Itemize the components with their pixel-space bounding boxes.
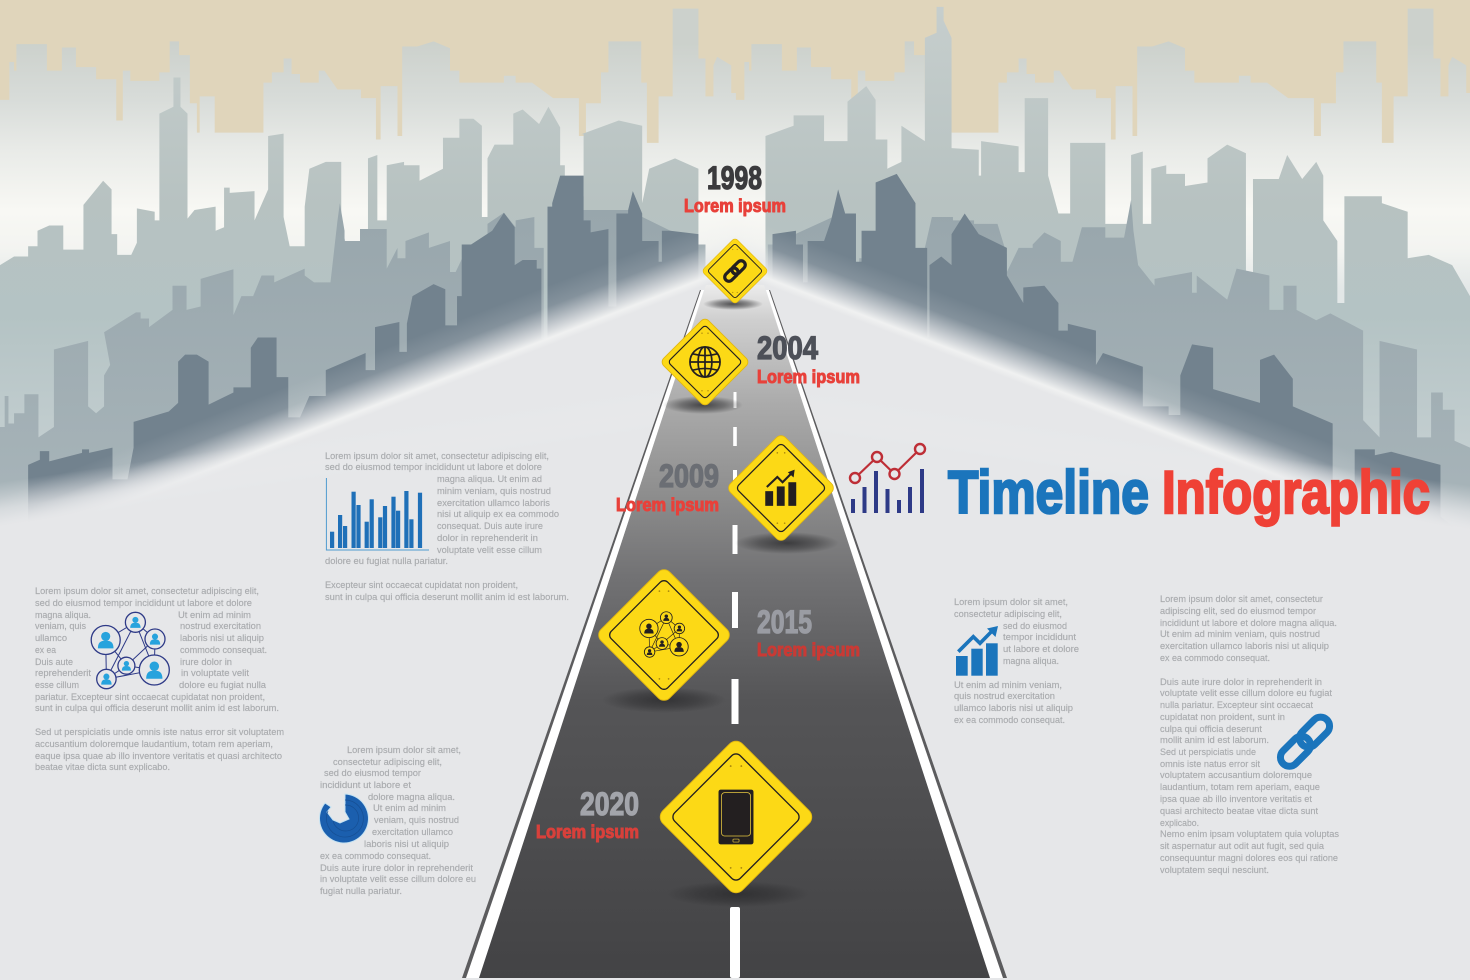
icon: chain: [723, 259, 747, 283]
icon: rising chart: [765, 470, 796, 506]
text block: lower middle: exercitation ullamco: [372, 826, 453, 837]
text block: lower middle: sed do eiusmod tempor: [324, 767, 421, 778]
text block: left: Lorem ipsum dolor sit amet, consectetur adipiscing elit,: [35, 585, 259, 596]
text block: right middle: tempor incididunt: [1003, 631, 1076, 642]
timeline label 2004: 2004: [757, 330, 818, 366]
text block: upper middle: nisi ut aliquip ex ea commodo: [437, 508, 559, 519]
text block: lower middle: Lorem ipsum dolor sit amet,: [347, 744, 461, 755]
text block: far right: adipiscing elit, sed do eiusmod tempor: [1160, 605, 1316, 616]
text block: upper middle: sed do eiusmod tempor incididunt ut labore et dolore: [325, 461, 542, 472]
text block: upper middle: sunt in culpa qui officia deserunt mollit anim id est laborum.: [325, 591, 569, 602]
centre dashes: [730, 392, 740, 978]
asphalt: [478, 285, 992, 978]
text block: left: commodo consequat.: [180, 644, 267, 655]
text block: left: dolore eu fugiat nulla: [179, 679, 267, 690]
text block: left: sunt in culpa qui officia deserunt mollit anim id est laborum.: [35, 702, 279, 713]
text block: right middle: consectetur adipiscing elit,: [954, 608, 1062, 619]
bar chart: [326, 478, 429, 550]
sign 1998: chain: [702, 238, 768, 304]
text block: far right: Sed ut perspiciatis unde: [1160, 746, 1256, 757]
text block: lower middle: in voluptate velit esse cillum dolore eu: [320, 873, 476, 884]
text block: right middle: ut labore et dolore: [1003, 643, 1079, 654]
ground left: [0, 0, 735, 980]
text block: far right: mollit anim id est laborum.: [1160, 734, 1269, 745]
sign 2009: chart: [726, 433, 836, 543]
text block: far right: cupidatat non proident, sunt in: [1160, 711, 1285, 722]
far skyline right: [735, 9, 1470, 980]
text block: lower middle: Duis aute irure dolor in reprehenderit: [320, 862, 473, 873]
text block: left: accusantium doloremque laudantium, totam rem aperiam,: [35, 738, 273, 749]
text block: right middle: [954, 596, 1079, 725]
near skyline right: [768, 200, 1470, 540]
text block: far right: ipsa quae ab illo inventore veritatis et: [1160, 793, 1312, 804]
text block: right middle: sed do eiusmod: [1003, 620, 1067, 631]
timeline label 1998: [684, 160, 786, 216]
ground right: [735, 0, 1470, 980]
text block: far right: Nemo enim ipsam voluptatem quia voluptas: [1160, 828, 1339, 839]
text block: right middle: magna aliqua.: [1003, 655, 1059, 666]
timeline label 2015: Lorem ipsum: [757, 639, 860, 660]
timeline label 2015: 2015: [757, 604, 812, 640]
text block: far right: Ut enim ad minim veniam, quis nostrud: [1160, 628, 1320, 639]
right outer line: [769, 290, 1007, 978]
sign shadows: [602, 298, 839, 907]
title: [948, 459, 1430, 526]
text block: left: magna aliqua.: [35, 609, 91, 620]
text block: left: [35, 585, 284, 772]
title icon: chart: [850, 444, 925, 513]
text block: far right: voluptatem accusantium doloremque: [1160, 769, 1312, 780]
text block: far right: voluptate velit esse cillum dolore eu fugiat: [1160, 687, 1332, 698]
icon: growth bars: [956, 626, 998, 676]
text block: left: in voluptate velit: [181, 667, 249, 678]
text block: left: reprehenderit: [35, 667, 91, 678]
icon: people network: [91, 612, 169, 689]
text block: right middle: ex ea commodo consequat.: [954, 714, 1065, 725]
text block: left: esse cillum: [35, 679, 79, 690]
text block: left: pariatur. Excepteur sint occaecat cupidatat non proident,: [35, 691, 265, 702]
sign 2004: globe: [660, 317, 750, 407]
text block: lower middle: Ut enim ad minim: [373, 802, 446, 813]
text block: far right: quasi architecto beatae vitae dicta sunt: [1160, 805, 1318, 816]
text block: lower middle: consectetur adipiscing elit,: [333, 756, 442, 767]
mid skyline right: [765, 7, 1470, 540]
text block: left: eaque ipsa quae ab illo inventore veritatis et quasi architecto: [35, 750, 282, 761]
icon: tablet: [719, 790, 753, 844]
text block: lower middle: veniam, quis nostrud: [374, 814, 459, 825]
sign 2015: network: [595, 566, 733, 704]
sign 2020: tablet: [656, 737, 816, 897]
near skyline left: [0, 203, 705, 540]
text block: right middle: ullamco laboris nisi ut aliquip: [954, 702, 1073, 713]
timeline label 2020: Lorem ipsum: [536, 821, 639, 842]
text block: left: laboris nisi ut aliquip: [180, 632, 264, 643]
text block: lower middle: dolore magna aliqua.: [368, 791, 455, 802]
text block: lower middle: ex ea commodo consequat.: [320, 850, 431, 861]
text block: far right: culpa qui officia deserunt: [1160, 723, 1262, 734]
text block: left: ullamco: [35, 632, 67, 643]
text block: far right: exercitation ullamco laboris nisi ut aliquip: [1160, 640, 1329, 651]
text block: left: Sed ut perspiciatis unde omnis iste natus error sit voluptatem: [35, 726, 284, 737]
text block: upper middle: Excepteur sint occaecat cupidatat non proident,: [325, 579, 518, 590]
text block: far right: ex ea commodo consequat.: [1160, 652, 1270, 663]
text block: right middle: Lorem ipsum dolor sit amet,: [954, 596, 1068, 607]
timeline label 2020: [536, 786, 639, 842]
text block: far right: [1160, 593, 1339, 875]
road: [462, 285, 1007, 978]
timeline label 1998: 1998: [707, 160, 762, 196]
text block: far right: laudantium, totam rem aperiam, eaque: [1160, 781, 1320, 792]
dark skyline left: [28, 176, 698, 540]
icon: people network: [640, 612, 688, 657]
text block: upper middle: exercitation ullamco laboris: [437, 497, 550, 508]
text block: upper middle: consequat. Duis aute irure: [437, 520, 543, 531]
text block: lower middle: fugiat nulla pariatur.: [320, 885, 402, 896]
text block: upper middle: magna aliqua. Ut enim ad: [437, 473, 542, 484]
text block: far right: nulla pariatur. Excepteur sint occaecat: [1160, 699, 1313, 710]
text block: upper middle: Lorem ipsum dolor sit amet, consectetur adipiscing elit,: [325, 450, 549, 461]
text block: left: ex ea: [35, 644, 57, 655]
text block: left: sed do eiusmod tempor incididunt ut labore et dolore: [35, 597, 252, 608]
timeline label 2009: 2009: [659, 458, 719, 494]
far skyline left: [0, 9, 736, 980]
timeline label 2009: Lorem ipsum: [616, 494, 719, 515]
text block: lower middle: [320, 744, 476, 896]
text block: far right: Lorem ipsum dolor sit amet, consectetur: [1160, 593, 1323, 604]
mid skyline left: [0, 77, 705, 540]
text block: left: beatae vitae dicta sunt explicabo.: [35, 761, 170, 772]
text block: left: Duis aute: [35, 656, 73, 667]
timeline label 2004: [757, 330, 860, 387]
timeline label 2009: [616, 458, 719, 515]
text block: upper middle: voluptate velit esse cillum: [437, 544, 542, 555]
text block: lower middle: incididunt ut labore et: [320, 779, 411, 790]
text block: right middle: Ut enim ad minim veniam,: [954, 679, 1062, 690]
text block: left: nostrud exercitation: [180, 620, 261, 631]
left outer line: [462, 290, 701, 978]
text block: left: Ut enim ad minim: [178, 609, 251, 620]
text block: upper middle: dolor in reprehenderit in: [437, 532, 538, 543]
right edge line: [766, 290, 1005, 978]
text block: far right: sit aspernatur aut odit aut fugit, sed quia: [1160, 840, 1325, 851]
timeline label 2004: Lorem ipsum: [757, 366, 860, 387]
text block: far right: explicabo.: [1160, 817, 1199, 828]
text block: upper middle: [325, 450, 569, 602]
timeline label 2020: 2020: [580, 786, 639, 822]
left edge line: [463, 290, 704, 978]
text block: left: irure dolor in: [180, 656, 232, 667]
text block: right middle: quis nostrud exercitation: [954, 690, 1055, 701]
timeline label 1998: Lorem ipsum: [684, 195, 786, 216]
timeline label 2015: [757, 604, 860, 660]
title: Timeline: [948, 459, 1149, 526]
icon: globe: [690, 347, 720, 377]
text block: far right: omnis iste natus error sit: [1160, 758, 1260, 769]
text block: lower middle: laboris nisi ut aliquip: [364, 838, 449, 849]
text block: far right: Duis aute irure dolor in reprehenderit in: [1160, 676, 1322, 687]
text block: upper middle: dolore eu fugiat nulla pariatur.: [325, 555, 448, 566]
text block: left: veniam, quis: [35, 620, 86, 631]
icon: blue chain link: [1277, 713, 1333, 770]
text block: upper middle: minim veniam, quis nostrud: [437, 485, 551, 496]
text block: far right: voluptatem sequi nesciunt.: [1160, 864, 1269, 875]
text block: far right: consequuntur magni dolores eos qui ratione: [1160, 852, 1338, 863]
icon: spiral pie: [319, 794, 368, 843]
dark skyline right: [772, 174, 1470, 540]
text block: far right: incididunt ut labore et dolore magna aliqua.: [1160, 617, 1337, 628]
